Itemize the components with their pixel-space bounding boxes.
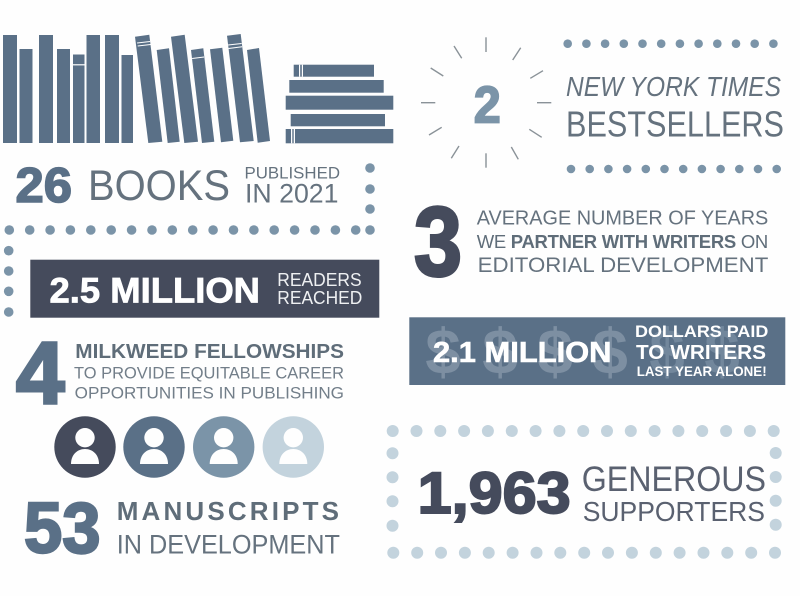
stat: 1,963 generous supporters with dotted frame: SUPPORTERS (583, 496, 765, 527)
stat: 4 Milkweed fellowships: MILKWEED FELLOWSHIPS (75, 341, 344, 363)
stat: 53 manuscripts in development: MANUSCRIPTS (117, 496, 339, 526)
banner: 2.1 million dollars paid to writers: $ (592, 316, 628, 388)
stat: 53 manuscripts in development: 53 (24, 490, 100, 568)
stat: 53 manuscripts in development (24, 490, 340, 568)
stat: 3 years partnering with writers: AVERAGE NUMBER OF YEARS (477, 208, 768, 230)
icon: sunburst with number 2: 2 (474, 76, 501, 134)
stat: 3 years partnering with writers (414, 186, 768, 296)
stat: 26 books published in 2021 (16, 159, 340, 213)
banner: 2.1 million dollars paid to writers: LAST YEAR ALONE! (637, 363, 767, 379)
stat: 26 books published in 2021: PUBLISHED (244, 164, 340, 183)
stat: 26 books published in 2021: IN 2021 (245, 179, 338, 209)
stat: 4 Milkweed fellowships: OPPORTUNITIES IN PUBLISHING (75, 384, 344, 403)
banner: 2.1 million dollars paid to writers: TO WRITERS (636, 342, 766, 364)
banner: 2.1 million dollars paid to writers: $ (704, 316, 740, 388)
stat: 26 books published in 2021: 26 (16, 159, 72, 213)
stat: 3 years partnering with writers: WE PARTNER WITH WRITERS ON (477, 231, 768, 252)
banner: 2.5 million readers reached (30, 260, 379, 318)
banner: 2.1 million dollars paid to writers: DOLLARS PAID (635, 322, 768, 341)
banner: 2.1 million dollars paid to writers: 2.1 MILLION (433, 337, 612, 369)
banner: 2.5 million readers reached: READERS (277, 269, 362, 290)
stat: 4 Milkweed fellowships (16, 324, 344, 422)
banner: 2.1 million dollars paid to writers: $ (537, 316, 573, 388)
icon: upright and leaning books (3, 34, 270, 143)
icon: four person circles (54, 416, 324, 478)
stat: 4 Milkweed fellowships: 4 (16, 324, 65, 422)
stat: 4 Milkweed fellowships: TO PROVIDE EQUITABLE CAREER (74, 364, 344, 383)
stat: New York Times bestsellers (563, 39, 784, 173)
banner: 2.5 million readers reached: REACHED (277, 287, 362, 308)
banner: 2.1 million dollars paid to writers (409, 316, 785, 388)
icon: sunburst with number 2 (421, 37, 551, 168)
banner: 2.1 million dollars paid to writers: $ (649, 316, 685, 388)
stat: 53 manuscripts in development: IN DEVELOPMENT (117, 529, 340, 559)
banner: 2.1 million dollars paid to writers: $ (425, 316, 461, 388)
dotted connector: books to readers (4, 163, 375, 317)
stat: 3 years partnering with writers: EDITORIAL DEVELOPMENT (478, 254, 768, 277)
stat: 1,963 generous supporters with dotted frame (386, 425, 782, 559)
stat: 3 years partnering with writers: 3 (414, 186, 462, 296)
banner: 2.1 million dollars paid to writers: $ (482, 316, 518, 388)
banner: 2.5 million readers reached: 2.5 MILLION (50, 270, 260, 310)
icon: stack of books (286, 65, 393, 143)
stat: 26 books published in 2021: BOOKS (88, 162, 230, 210)
stat: 1,963 generous supporters with dotted frame: 1,963 (418, 461, 571, 526)
stat: 1,963 generous supporters with dotted frame: GENEROUS (582, 460, 766, 499)
